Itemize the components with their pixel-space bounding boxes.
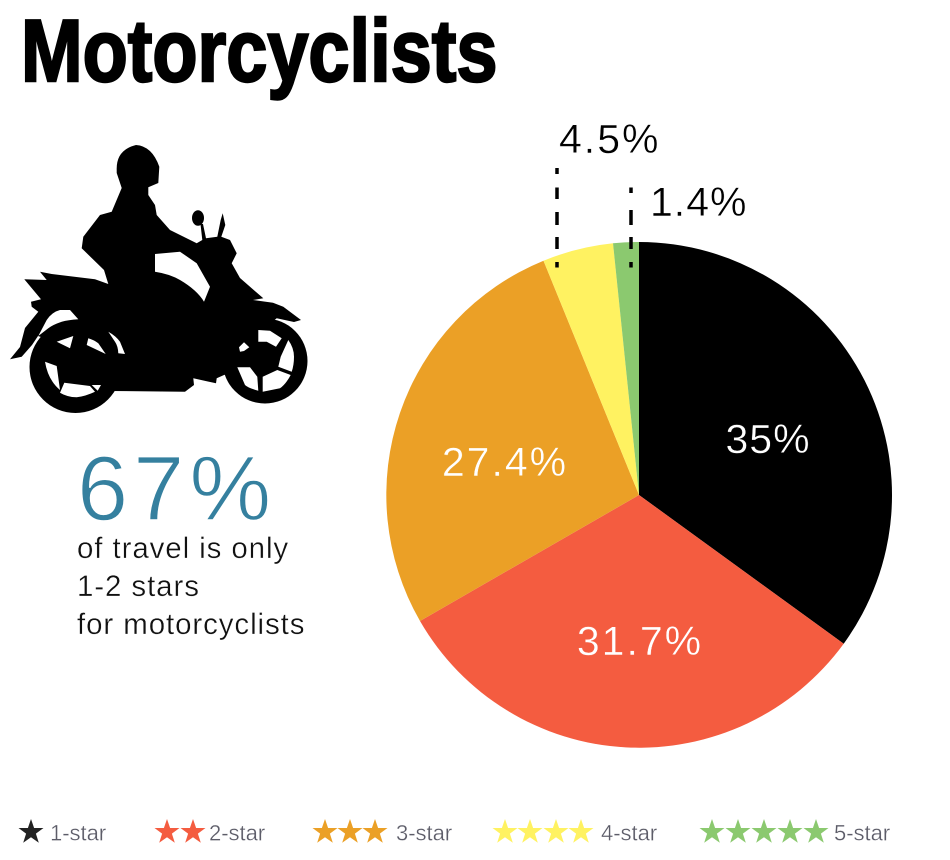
title: Motorcyclists — [21, 2, 497, 100]
statistic description: 1-2 stars — [77, 570, 200, 603]
label: 4.5%: 4.5% — [559, 116, 660, 162]
slice: 5-star 1.4% — [613, 242, 639, 495]
statistic description — [77, 532, 305, 641]
pie chart — [386, 242, 892, 748]
legend item: 5-star — [700, 819, 890, 846]
label: 31.7%: 31.7% — [577, 618, 703, 664]
icon: motorcycle rider silhouette — [10, 145, 308, 413]
legend — [18, 819, 890, 846]
legend item: 4-star — [492, 819, 657, 846]
big statistic: 67% — [77, 438, 276, 540]
label: 1.4%: 1.4% — [650, 179, 747, 225]
slice: 2-star 31.7% — [420, 495, 844, 748]
callout: 67% of travel — [77, 438, 305, 641]
legend item: 3-star — [312, 819, 452, 846]
legend item: 2-star — [154, 819, 265, 846]
legend item: 5-star: 5-star — [834, 820, 890, 846]
legend item: 3-star: 3-star — [396, 820, 452, 846]
label: 27.4%: 27.4% — [442, 439, 568, 485]
label: 35%: 35% — [725, 416, 811, 462]
legend item: 4-star: 4-star — [601, 820, 657, 846]
legend item: 1-star — [18, 819, 106, 846]
leader line: 4.5% — [555, 168, 559, 268]
slice: 1-star 35% — [639, 242, 892, 644]
legend item: 1-star: 1-star — [50, 820, 106, 846]
statistic description: of travel is only — [77, 532, 289, 565]
leader line: 1.4% — [629, 188, 633, 268]
slice: 3-star 27.4% — [386, 261, 639, 621]
statistic description: for motorcyclists — [77, 608, 305, 641]
legend item: 2-star: 2-star — [209, 820, 265, 846]
slice: 4-star 4.5% — [544, 243, 639, 495]
